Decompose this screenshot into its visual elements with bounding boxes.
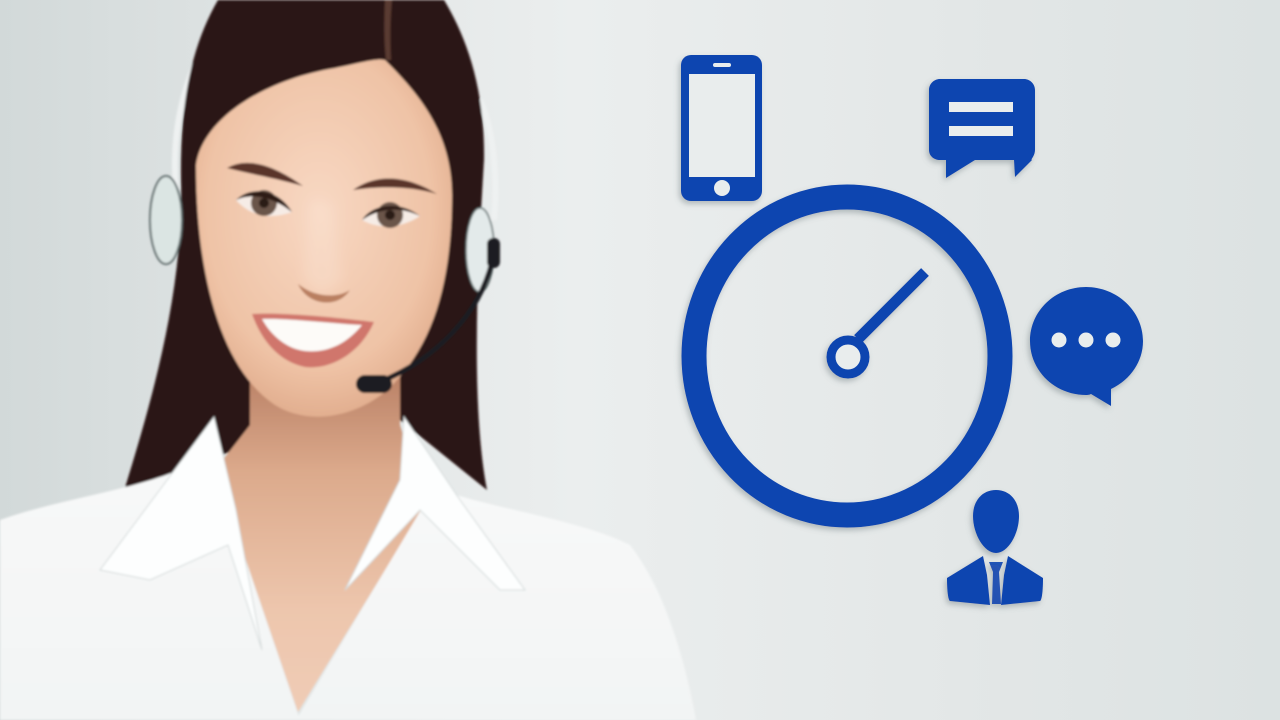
headset band xyxy=(175,28,495,220)
nose xyxy=(298,200,350,303)
clock hub xyxy=(831,340,865,374)
left collar xyxy=(100,417,262,650)
woman with headset xyxy=(0,0,696,720)
right ear cup xyxy=(466,208,494,292)
microphone boom xyxy=(372,262,492,385)
neck and chest xyxy=(215,370,425,712)
mouth xyxy=(252,314,374,367)
headset xyxy=(150,176,500,393)
right collar xyxy=(345,417,525,590)
left eyebrow xyxy=(227,163,303,186)
hair parting xyxy=(384,0,392,60)
clock hand xyxy=(858,272,925,339)
face xyxy=(196,60,452,417)
microphone xyxy=(356,375,392,393)
shirt xyxy=(0,417,696,720)
left eye xyxy=(236,190,292,216)
hair xyxy=(124,0,487,491)
icon: message bubble with lines xyxy=(929,79,1035,178)
icon: clock dial xyxy=(694,197,1000,515)
icon: chat bubble with dots xyxy=(1030,287,1143,406)
left ear cup xyxy=(150,176,182,264)
right eye xyxy=(362,202,420,228)
right eyebrow xyxy=(353,178,437,194)
icon: business person xyxy=(947,490,1043,605)
icon: smartphone xyxy=(681,55,762,201)
